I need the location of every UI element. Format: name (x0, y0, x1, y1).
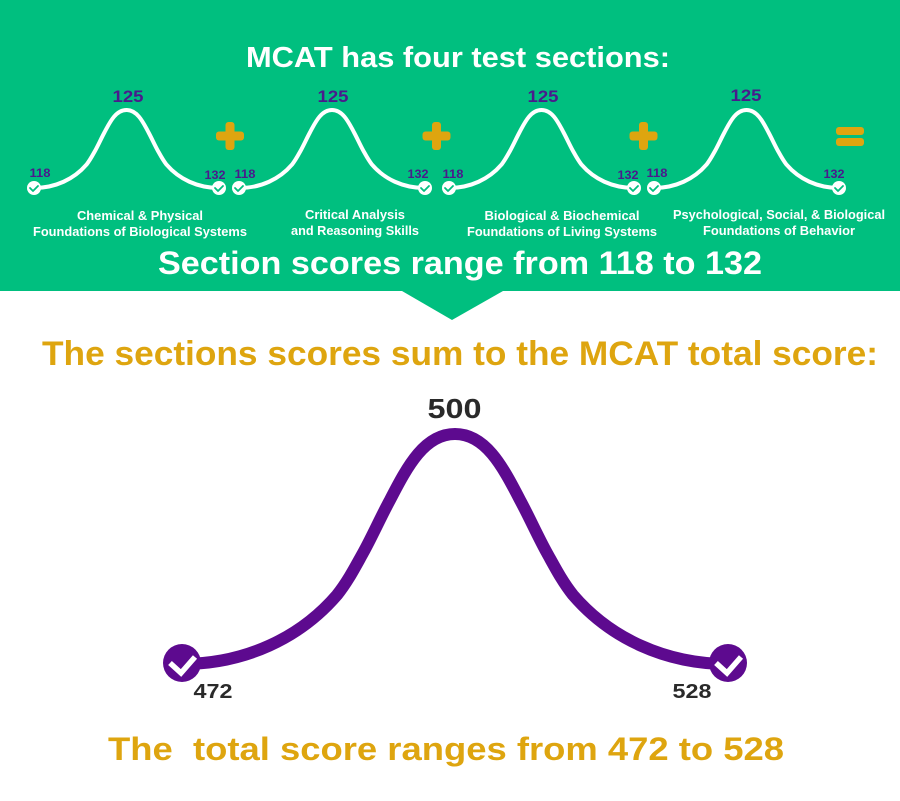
minimum value 472: 472 (194, 681, 232, 703)
section label 1 (33, 208, 247, 239)
equals sign (836, 127, 864, 146)
peak value 500: 500 (428, 393, 482, 424)
section curve 2: 118 (234, 169, 256, 181)
section label 3: Foundations of Living Systems (467, 224, 657, 239)
section label 2: Critical Analysis (305, 207, 405, 222)
section curve 1: 132 (204, 170, 226, 182)
section label 2: and Reasoning Skills (291, 223, 419, 238)
section curve 4: 118 (646, 168, 668, 180)
section curve 1: 125 (112, 88, 144, 106)
section curve 3: 118 (442, 169, 464, 181)
section curve 4 (646, 87, 846, 195)
section label 4 (673, 207, 885, 238)
title: four test sections: MCAT has four test sections: (246, 42, 670, 74)
total score curve (163, 393, 747, 703)
section curve 1: 118 (30, 168, 51, 180)
plus sign 1 (216, 122, 244, 150)
section label 3: Biological & Biochemical (484, 208, 640, 223)
section label 1: Chemical & Physical (77, 208, 203, 223)
right endpoint check (709, 644, 747, 682)
heading: total score sum: The sections scores sum to the MCAT total score: (42, 335, 878, 373)
section curve 3 (442, 88, 641, 195)
section curve 3: 125 (528, 88, 558, 106)
section curve 1 (27, 88, 226, 195)
section curve 4: 125 (730, 87, 762, 105)
section curve 2: 125 (318, 88, 348, 106)
section label 4: Foundations of Behavior (703, 223, 855, 238)
green header panel (0, 0, 900, 320)
section curve 2 (232, 88, 432, 195)
section curve 3: 132 (618, 170, 638, 182)
section curve 4: 132 (824, 169, 844, 181)
left endpoint check (163, 644, 201, 682)
total score range statement: The total score ranges from 472 to 528 (108, 731, 784, 767)
section label 1: Foundations of Biological Systems (33, 224, 247, 239)
plus sign 2 (422, 122, 450, 150)
section label 3 (467, 208, 657, 239)
maximum value 528: 528 (672, 681, 712, 703)
section score range statement: Section scores range from 118 to 132 (158, 245, 762, 281)
plus sign 3 (630, 122, 658, 150)
section label 2 (291, 207, 419, 238)
section curve 2: 132 (408, 169, 428, 181)
section label 4: Psychological, Social, & Biological (673, 207, 885, 222)
